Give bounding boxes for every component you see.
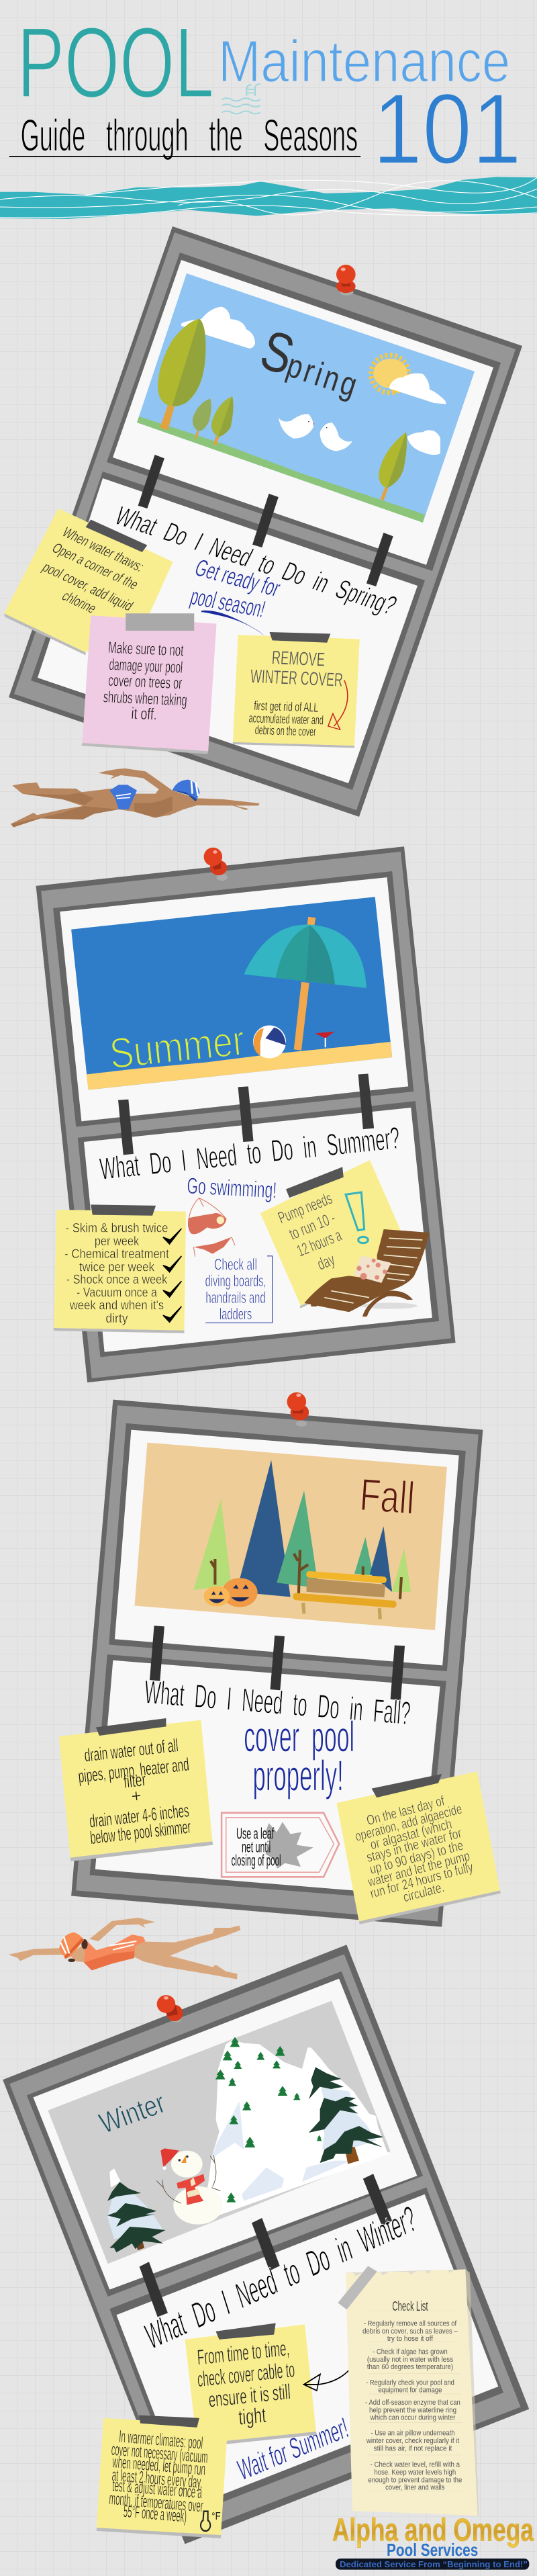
spring content	[4, 455, 401, 754]
fall photo card	[109, 1423, 466, 1671]
tapes	[140, 2174, 392, 2317]
note tape	[139, 2415, 199, 2428]
sticky note: remove cover: REMOVE	[271, 646, 326, 670]
tag: leaf net: Use a leaf	[236, 1825, 275, 1842]
sticky note: weekly tasks: per week	[95, 1234, 139, 1249]
check-all text: handrails and	[205, 1289, 266, 1307]
blue note: Go swimming!	[187, 1174, 277, 1204]
sticky note: drain: drain water 4-6 inches	[89, 1800, 190, 1832]
pumpkins	[204, 1578, 258, 1607]
check list items: - Check if algae has grown	[373, 2348, 448, 2356]
tapes	[118, 1073, 374, 1155]
note tape	[126, 613, 194, 631]
sticky note: weekly tasks: - Vacuum once a	[77, 1286, 157, 1300]
cloud lower right	[407, 430, 440, 455]
sticky note: algaecide: up to 90 days) to the	[369, 1838, 465, 1877]
logo: tagline pill	[336, 2559, 529, 2570]
sticky note: cover cable: ensure it is still	[207, 2381, 291, 2412]
small trees	[193, 396, 233, 445]
bench	[296, 1574, 393, 1619]
check list items: winter cover, check regularly if it	[366, 2437, 459, 2445]
lounge chair	[304, 1229, 430, 1317]
check list items: enough to prevent damage to the	[368, 2476, 462, 2484]
mini pines	[215, 2037, 322, 2203]
sticky note: weekly tasks	[54, 1204, 186, 1333]
sticky note: algaecide: On the last day of	[365, 1793, 446, 1828]
sticky note: remove cover: WINTER COVER	[250, 665, 344, 691]
cocktail	[315, 1032, 334, 1047]
blue note: pool season!	[187, 583, 268, 623]
panel: fall frame	[59, 1392, 501, 1927]
season name: Winter	[95, 2087, 169, 2140]
check list items: - Use an air pillow underneath	[371, 2430, 455, 2438]
sticky note: algaecide: stays in the water for	[365, 1826, 463, 1865]
pillow	[354, 1255, 391, 1283]
tag: leaf net: net until	[242, 1838, 271, 1856]
sticky note: pink	[81, 613, 216, 754]
fall checklist card	[90, 1654, 446, 1902]
check marks	[163, 1229, 181, 1322]
sand	[87, 1042, 392, 1090]
summer picture	[71, 897, 392, 1090]
spring checklist card	[31, 472, 425, 790]
spring illustration	[158, 307, 446, 500]
sticky note: cover cable: From time to time,	[197, 2337, 290, 2370]
spring sky picture	[137, 273, 475, 523]
snowy mountain	[193, 2040, 389, 2225]
winter picture	[48, 2001, 391, 2264]
sticky note: remove cover: debris on the cover	[254, 723, 316, 739]
spring grass	[137, 416, 425, 523]
sticky note: warmer climates: at least 2 hours every day,	[111, 2465, 203, 2492]
sticky note: drain: pipes, pump, heater and	[77, 1754, 190, 1787]
note tape	[286, 1167, 344, 1198]
panel: summer frame	[36, 846, 456, 1382]
pin: spring	[336, 265, 356, 296]
tapes	[138, 455, 393, 586]
sticky note: warmer climates: cover not necessary (vacuum	[111, 2440, 208, 2467]
check list items: still has air, if not replace it	[374, 2444, 452, 2452]
big pine	[309, 2067, 384, 2164]
title block	[9, 7, 522, 185]
check-all text	[205, 1255, 266, 1323]
summer icons	[188, 1192, 430, 1317]
sticky note: pink: damage your pool	[109, 656, 183, 676]
sticky note: weekly tasks: - Skim & brush twice	[65, 1221, 168, 1236]
sticky note: weekly tasks: dirty	[105, 1311, 128, 1326]
sticky note: warmer climates: 55°F once a week)	[123, 2501, 187, 2526]
panel: winter frame	[3, 1945, 529, 2544]
sticky note: algaecide: circulate.	[401, 1880, 446, 1906]
umbrella	[244, 917, 367, 1051]
sticky note: algaecide: run for 24 hours to fully	[369, 1860, 475, 1902]
check list items: which can occur during winter	[370, 2413, 456, 2422]
sticky note: drain: below the pool skimmer	[89, 1816, 192, 1848]
sticky note: remove cover: accumulated water and	[248, 711, 324, 727]
logo: tagline: Dedicated Service From “Beginning to End!”	[340, 2559, 528, 2569]
thermometer icon: °F	[211, 2511, 221, 2522]
sticky note: weekly tasks: - Chemical treatment	[64, 1247, 169, 1261]
note tape	[86, 520, 147, 552]
summer photo card	[53, 871, 413, 1127]
spring photo card	[107, 253, 501, 571]
season name: Fall	[358, 1468, 416, 1523]
sticky note: warmer climates: In warmer climates: pool	[119, 2427, 203, 2452]
tree	[158, 318, 205, 430]
check list note	[338, 2266, 479, 2516]
sticky note: drain: filter	[123, 1769, 147, 1792]
note tape	[215, 2323, 276, 2340]
check-all text: diving boards,	[205, 1272, 266, 1290]
bikini icon	[188, 1198, 235, 1257]
pin	[204, 848, 228, 881]
cloud by sun	[389, 373, 446, 404]
title: POOL: POOL	[17, 7, 214, 119]
note tape	[96, 1718, 166, 1736]
check list items: help prevent the waterline ring	[369, 2406, 456, 2414]
tag: leaf net	[222, 1813, 339, 1877]
sticky note: cover cable	[185, 2323, 317, 2447]
check-all text: Check all	[214, 1255, 257, 1274]
check list items: equipment for damage	[378, 2387, 442, 2395]
blue note: Wait for Summer!	[234, 2411, 352, 2487]
sticky note: pump	[260, 1160, 411, 1308]
sticky note: warmer climates	[97, 2415, 228, 2538]
logo	[332, 2512, 534, 2570]
water wave band	[0, 177, 537, 219]
panel: spring frame	[9, 226, 522, 817]
check list items: - Check water level, refill with a	[371, 2461, 460, 2469]
winter checklist card	[109, 2187, 503, 2516]
sticky note: thaw: chlorine	[59, 588, 99, 616]
note tape	[338, 2266, 377, 2309]
winter illustration	[95, 2037, 389, 2252]
divider lines	[364, 2311, 462, 2491]
sticky note: warmer climates: month, if temperatures over	[109, 2489, 204, 2516]
sticky note: cover cable: tight	[238, 2404, 266, 2430]
check list items: than 60 degrees temperature)	[367, 2363, 453, 2371]
tag: leaf net: closing of pool	[232, 1852, 281, 1869]
sticky note: drain: +	[130, 1785, 142, 1807]
sticky note: algaecide: operation, add algaecide	[354, 1802, 464, 1845]
small pine	[107, 2168, 166, 2252]
birds	[279, 414, 352, 451]
sticky note: cover cable: check cover cable to	[197, 2358, 295, 2392]
sticky note: pink: it off.	[131, 705, 158, 723]
tapes	[150, 1626, 405, 1700]
sticky note: remove cover: first get rid of ALL	[254, 699, 319, 715]
sticky note: weekly tasks: twice per week	[79, 1259, 154, 1274]
leaf icon	[265, 1822, 313, 1869]
logo: pool services: Pool Services	[387, 2540, 478, 2560]
sticky note: pump: day	[315, 1251, 338, 1274]
sticky note: drain: drain water out of all	[83, 1734, 179, 1766]
check list items: - Regularly remove all sources of	[364, 2320, 456, 2328]
check list items: - Add off-season enzyme that can	[365, 2399, 460, 2407]
icon: pool ladder	[222, 84, 260, 114]
note tape	[91, 1204, 156, 1216]
cloud	[181, 307, 255, 349]
sticky note: thaw: Open a corner of the	[49, 540, 142, 592]
check list items: - Regularly check your pool and	[366, 2379, 454, 2387]
check-all text: ladders	[219, 1305, 252, 1323]
check list items: (usually not in water with less	[367, 2356, 453, 2364]
subtitle underline	[9, 156, 360, 157]
blue headline: cover pool	[244, 1714, 354, 1761]
fall picture	[135, 1443, 447, 1630]
pin	[287, 1392, 309, 1427]
blue note	[187, 554, 284, 623]
arrow to checklist	[303, 2344, 364, 2391]
pin	[157, 1995, 183, 2023]
swimmer: orange cap	[9, 1918, 240, 1980]
sticky note: thaw: pool cover, add liquid	[40, 559, 136, 614]
red arrow	[328, 680, 348, 729]
blue bracket	[205, 1256, 273, 1323]
sticky note: algaecide: water and let the pump	[366, 1849, 471, 1890]
check list items: hose. Keep water levels high	[374, 2469, 456, 2477]
winter content	[97, 1995, 503, 2538]
blue headline	[244, 1714, 354, 1800]
sticky note: warmer climates: test & adjust water once a	[112, 2475, 203, 2502]
sticky note: pink: cover on trees or	[108, 671, 183, 693]
season name: Summer	[107, 1016, 247, 1078]
check list items	[362, 2320, 462, 2492]
beach ball	[253, 1026, 286, 1059]
sticky note: thaw	[4, 508, 173, 655]
sticky note: pink: shrubs when taking	[103, 688, 188, 709]
blue note: Get ready for	[191, 554, 284, 602]
sticky note: pink: Make sure to not	[107, 638, 185, 660]
check list items: debris on cover, such as leaves –	[362, 2327, 458, 2336]
blue headline: properly!	[253, 1752, 344, 1800]
note tape	[372, 1774, 442, 1797]
sticky note: algaecide: or algastat (which	[369, 1816, 453, 1853]
sticky note: drain	[59, 1718, 213, 1861]
sticky note: pump: Pump needs	[276, 1190, 335, 1227]
check list items: cover, liner and walls	[385, 2484, 444, 2492]
sticky note: pump: to run 10 -	[287, 1209, 338, 1244]
check list items: try to hose it off	[387, 2335, 433, 2343]
blue swoosh	[201, 611, 264, 635]
sticky note: weekly tasks: - Shock once a week	[66, 1272, 167, 1287]
winter photo card	[27, 1971, 423, 2297]
note tape	[270, 632, 330, 643]
check list heading: Check List	[392, 2299, 428, 2314]
tree right	[379, 432, 407, 500]
trees	[193, 1460, 411, 1599]
sticky note: pump: 12 hours a	[295, 1227, 344, 1261]
sun	[371, 355, 411, 394]
exclamation icon	[346, 1192, 368, 1243]
sticky note: warmer climates: when needed, let pump run	[111, 2452, 206, 2479]
sticky note: algaecide	[337, 1771, 501, 1924]
sticky note: remove cover	[233, 632, 360, 748]
sticky note: thaw: When water thaws:	[59, 524, 148, 574]
snowman	[156, 2148, 223, 2225]
swimmer: blue cap	[11, 768, 260, 828]
summer checklist card	[78, 1101, 439, 1357]
thermometer icon	[201, 2511, 221, 2531]
sticky note: weekly tasks: week and when it's	[69, 1298, 164, 1313]
season name: Spring	[254, 318, 371, 409]
